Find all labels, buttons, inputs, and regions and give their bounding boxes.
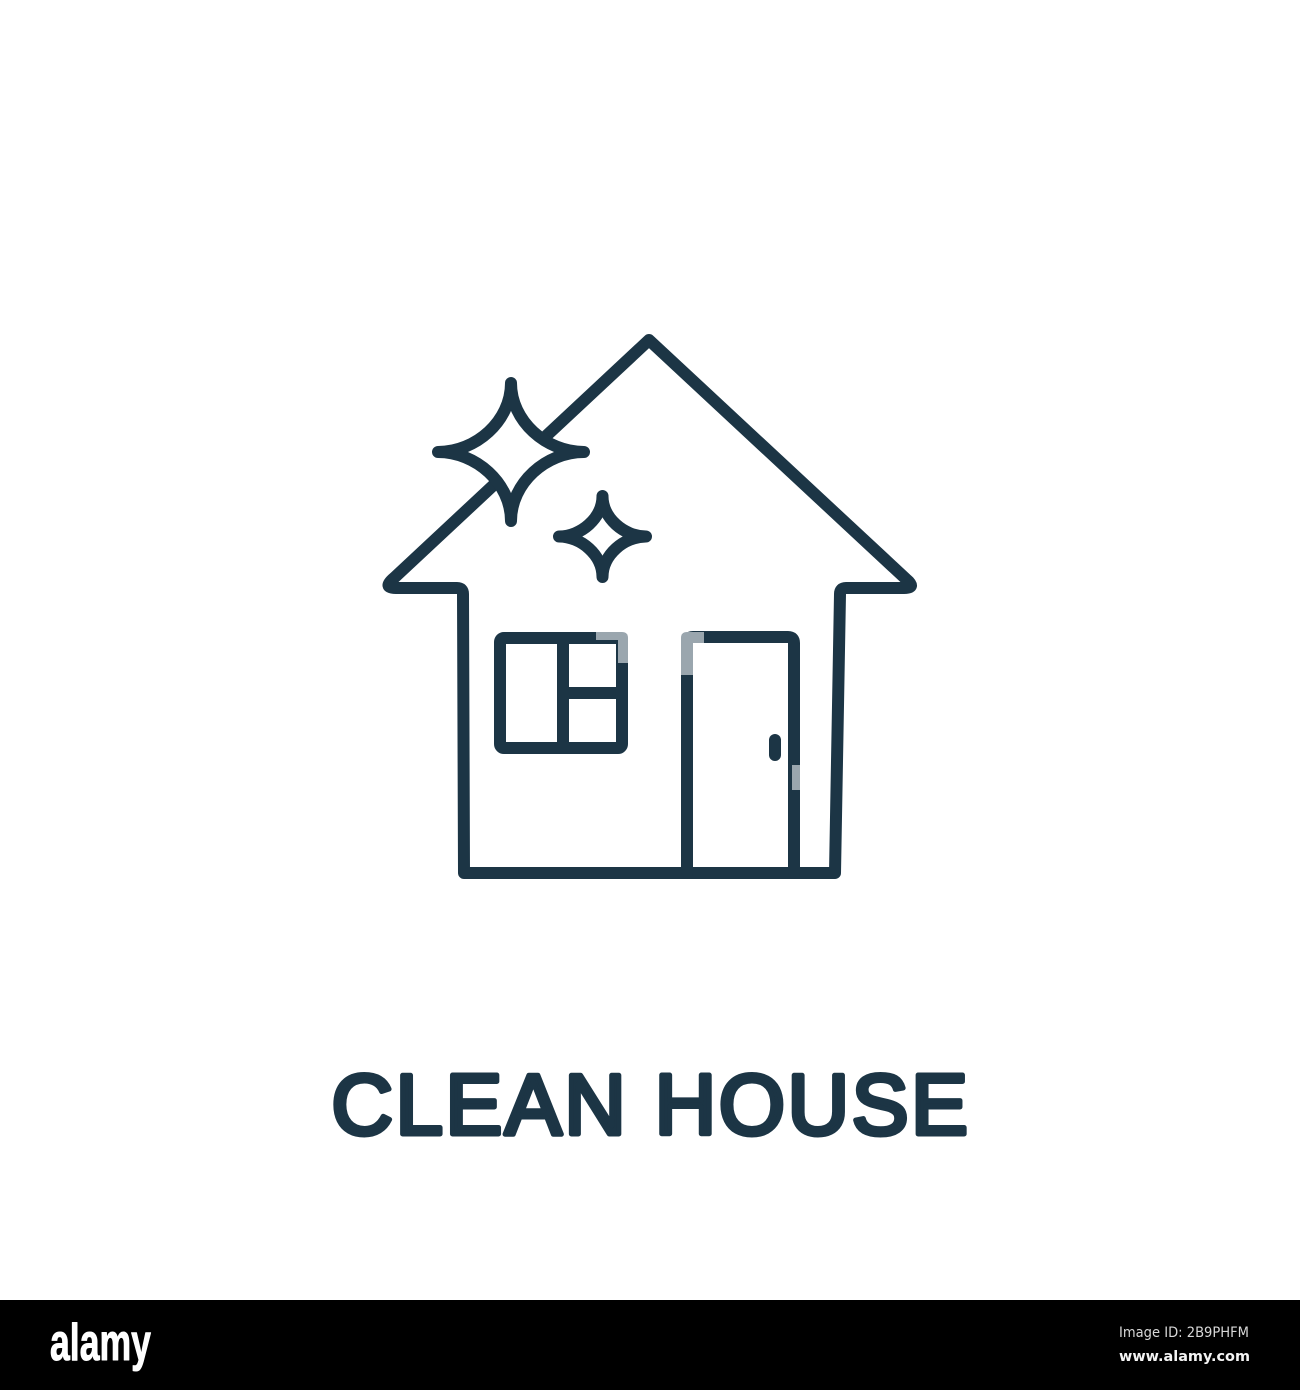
logo text: alamy	[50, 1314, 151, 1372]
footer bar	[0, 1300, 1300, 1390]
image id label: Image ID: 2B9PHFM	[1119, 1325, 1249, 1341]
small sparkle	[559, 496, 646, 577]
icon: clean house with sparkles	[388, 340, 911, 873]
title: CLEAN HOUSE	[331, 1058, 971, 1153]
large sparkle	[438, 383, 584, 521]
window	[500, 638, 622, 748]
site address: www.alamy.com	[1119, 1349, 1250, 1365]
door	[687, 637, 794, 873]
house outline	[388, 340, 911, 873]
watermark fragments over icon	[596, 632, 800, 790]
